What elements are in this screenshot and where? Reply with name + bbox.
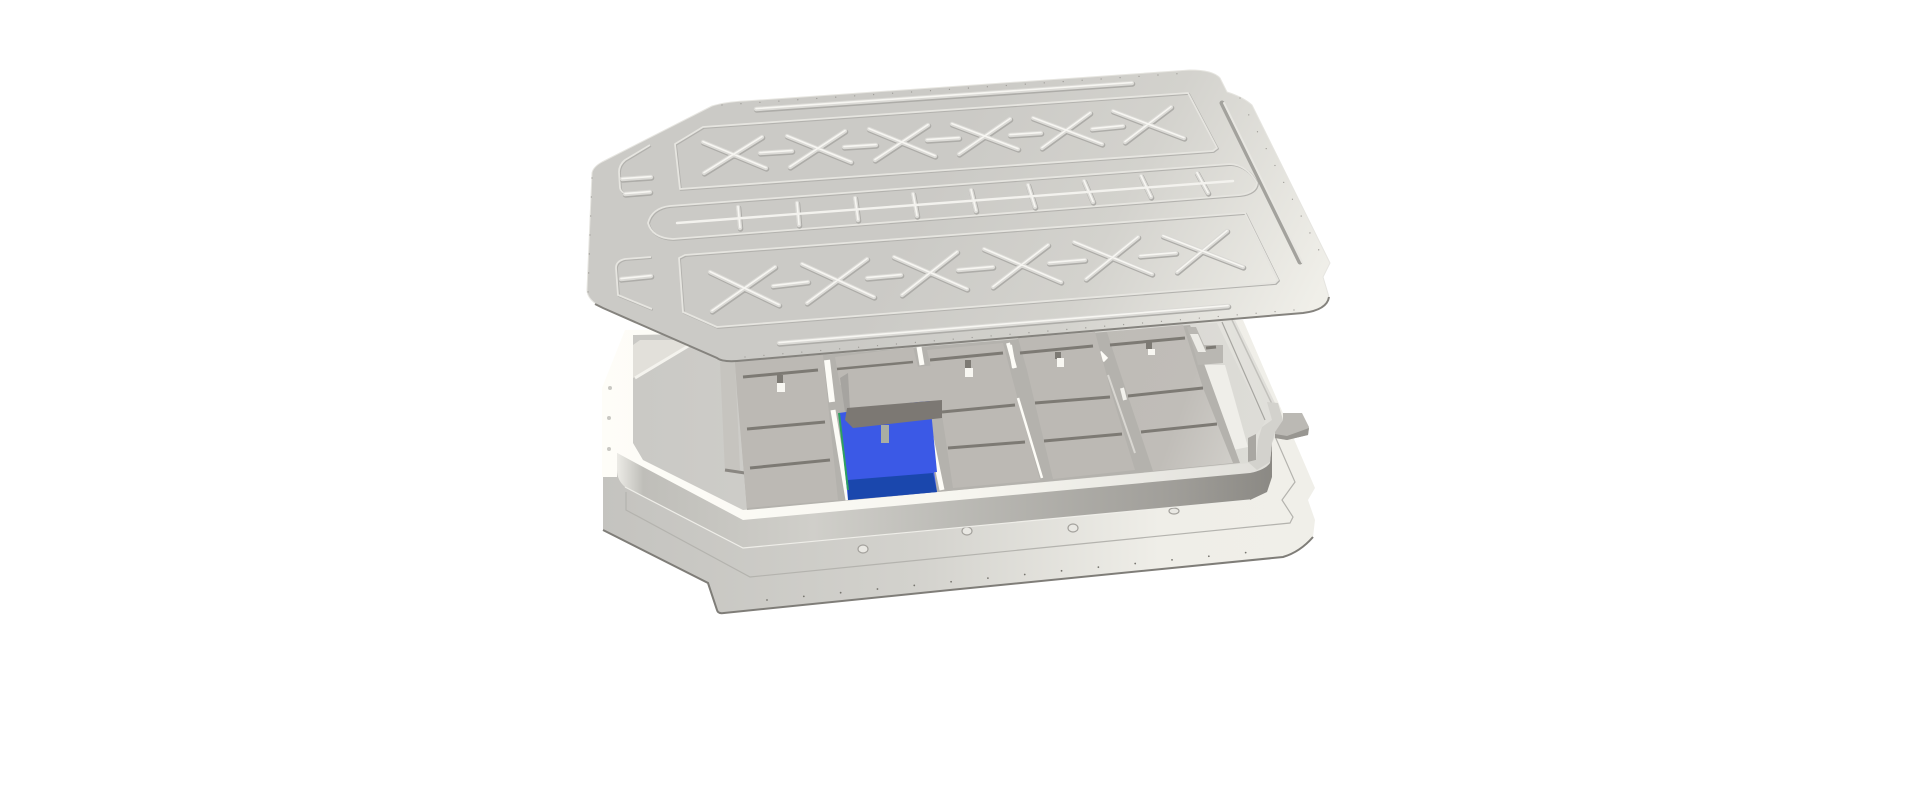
centre rib [677,181,1233,223]
battery module column 3 [927,343,1042,488]
right edge rib [1222,103,1302,262]
battery module column 5 [1107,325,1233,471]
module bed [735,325,1240,510]
connector block [1187,327,1223,365]
battery module column 1 [720,355,838,508]
rim bend [1248,402,1283,470]
battery module column 4 [1018,332,1135,479]
module gaps [827,343,1135,500]
tray wall [617,443,1272,548]
tab [1275,413,1309,440]
inner wall at bend [1248,434,1256,462]
exposed cell strip [881,425,889,443]
lid [587,70,1330,361]
pressed cross ribs and bars [621,83,1244,344]
blue battery module [839,400,937,500]
pressed panel outlines [616,93,1279,328]
base fasteners [858,508,1179,553]
lid rivets [588,73,1325,357]
tray floor [633,323,1265,510]
lid plate [587,70,1330,361]
rim bend and mounting tab [1248,402,1309,470]
lower tray assembly [602,320,1315,613]
grey module lifted above blue module [840,365,942,428]
tray rim and left flange [602,320,1282,520]
base plate [603,320,1315,613]
lid underside edge [595,297,1329,361]
module column 2 rear [835,347,920,385]
